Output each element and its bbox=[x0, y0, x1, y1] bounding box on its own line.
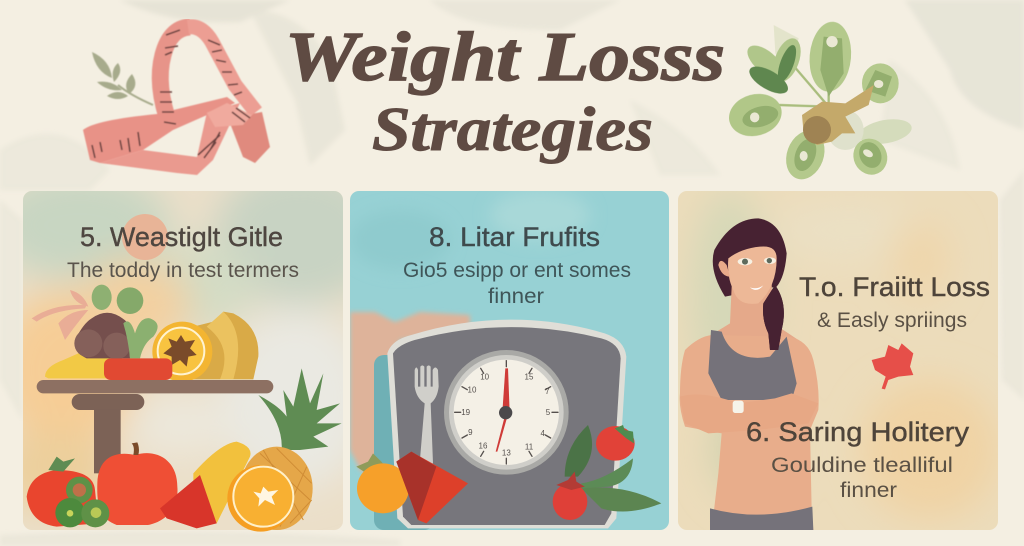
crossed arms bbox=[680, 393, 818, 433]
shorts bbox=[710, 507, 813, 530]
hair back bbox=[713, 218, 787, 297]
text: Gio5 esipp or ent somes finner: finner bbox=[488, 285, 544, 308]
dial numbers: 7 bbox=[545, 387, 550, 396]
title line 1: Weight Losss bbox=[285, 19, 725, 96]
red leaf bbox=[872, 343, 913, 389]
decorative peach circle bbox=[122, 214, 168, 260]
icon: pink measuring tape bbox=[83, 27, 270, 175]
ponytail bbox=[763, 285, 784, 350]
dial numbers: 10 bbox=[480, 372, 490, 381]
text: Gouldine tlealliful finner bbox=[771, 454, 953, 502]
title bbox=[285, 19, 725, 164]
panel 1 background bbox=[23, 191, 343, 530]
dial numbers: 13 bbox=[502, 448, 511, 457]
dial numbers: 11 bbox=[525, 442, 534, 451]
text: Gouldine tlealliful finner: finner bbox=[840, 479, 897, 502]
text: Gouldine tlealliful finner: Gouldine tlealliful bbox=[771, 454, 953, 477]
text: & Easly spriings: & Easly spriings bbox=[817, 309, 967, 332]
face bbox=[728, 246, 777, 304]
title line 2: Strategies bbox=[372, 96, 653, 164]
text: The toddy in test termers: The toddy in test termers bbox=[67, 259, 299, 282]
heading: T.o. Fraiitt Loss: T.o. Fraiitt Loss bbox=[799, 272, 990, 302]
heading: 8. Litar Frufits: 8. Litar Frufits bbox=[429, 222, 600, 252]
panel 3 background bbox=[678, 190, 1000, 530]
woman illustration bbox=[680, 218, 913, 530]
scale illustration bbox=[356, 320, 661, 528]
dial numbers: 10 bbox=[468, 386, 477, 395]
panel: fruit table bbox=[23, 191, 343, 532]
icon: green leaf sprig bbox=[724, 20, 914, 185]
dial numbers: 15 bbox=[525, 372, 534, 381]
icon: olive sprig bbox=[92, 52, 153, 105]
dial numbers: 4 bbox=[540, 429, 545, 438]
fruit illustration bbox=[27, 285, 342, 532]
sports top bbox=[708, 330, 797, 400]
panel 2 background bbox=[350, 190, 669, 530]
heading: 5. Weastiglt Gitle: 5. Weastiglt Gitle bbox=[80, 222, 283, 252]
torso bbox=[680, 335, 819, 530]
text: Gio5 esipp or ent somes finner: Gio5 esipp or ent somes bbox=[403, 259, 631, 282]
dial numbers: 5 bbox=[546, 408, 551, 417]
panel: scale bbox=[350, 190, 669, 530]
panel: woman bbox=[678, 190, 1000, 530]
heading: 6. Saring Holitery: 6. Saring Holitery bbox=[746, 417, 970, 447]
text: Gio5 esipp or ent somes finner bbox=[403, 259, 631, 308]
dial numbers: 9 bbox=[468, 428, 473, 437]
neck bbox=[708, 283, 798, 340]
dial numbers: 16 bbox=[479, 441, 488, 450]
dial numbers: 19 bbox=[461, 408, 471, 417]
dial numbers bbox=[461, 372, 551, 457]
fork bbox=[415, 365, 439, 463]
